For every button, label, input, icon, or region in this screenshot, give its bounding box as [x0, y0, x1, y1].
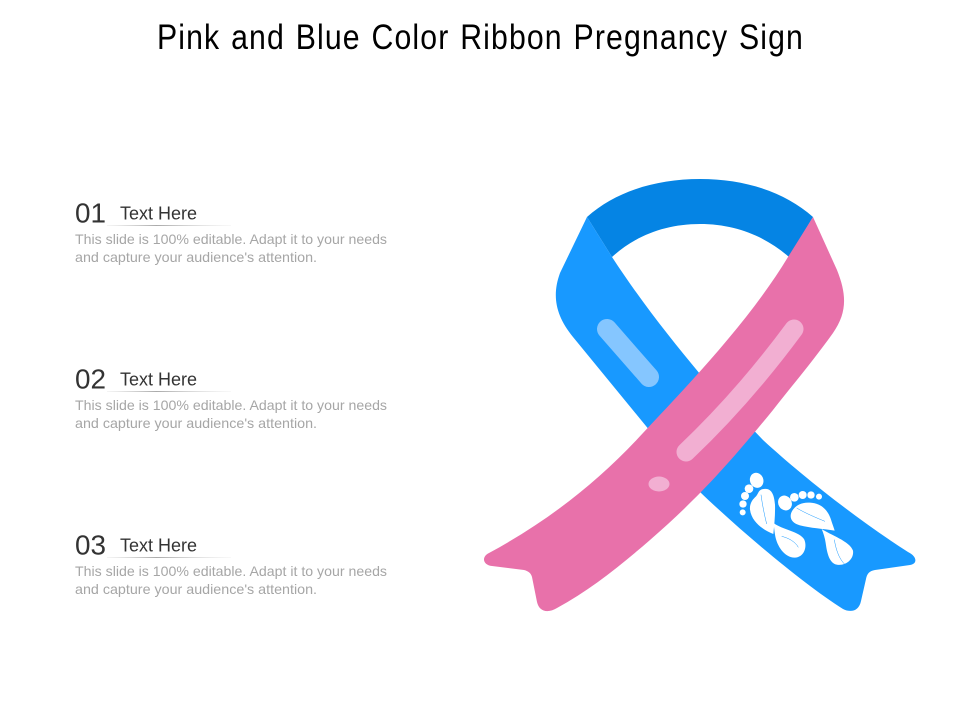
number 01: 01	[75, 198, 106, 228]
list item 01	[75, 198, 387, 265]
body text 02: This slide is 100% editable. Adapt it to your needs	[75, 397, 387, 413]
title: Pink and Blue Color Ribbon Pregnancy Sign	[157, 18, 804, 57]
pink ribbon band	[484, 217, 844, 611]
body text 01: and capture your audience's attention.	[75, 249, 317, 265]
body text 02: and capture your audience's attention.	[75, 415, 317, 431]
list item 02	[75, 364, 387, 431]
body text 01: This slide is 100% editable. Adapt it to your needs	[75, 231, 387, 247]
body text 03: and capture your audience's attention.	[75, 581, 317, 597]
pink highlight	[686, 329, 794, 452]
heading 01: Text Here	[120, 204, 197, 224]
left footprint	[739, 471, 805, 558]
body text 03: This slide is 100% editable. Adapt it to your needs	[75, 563, 387, 579]
blue highlight	[607, 329, 649, 377]
number 02: 02	[75, 364, 106, 394]
blue ribbon band	[556, 217, 915, 611]
icon: baby footprints	[739, 471, 853, 565]
heading 02: Text Here	[120, 370, 197, 390]
number 03: 03	[75, 530, 106, 560]
pink highlight dot	[648, 476, 670, 492]
list item 03	[75, 530, 387, 597]
right footprint	[775, 491, 853, 565]
ribbon top loop	[587, 179, 813, 257]
ribbon	[484, 179, 915, 611]
heading 03: Text Here	[120, 536, 197, 556]
